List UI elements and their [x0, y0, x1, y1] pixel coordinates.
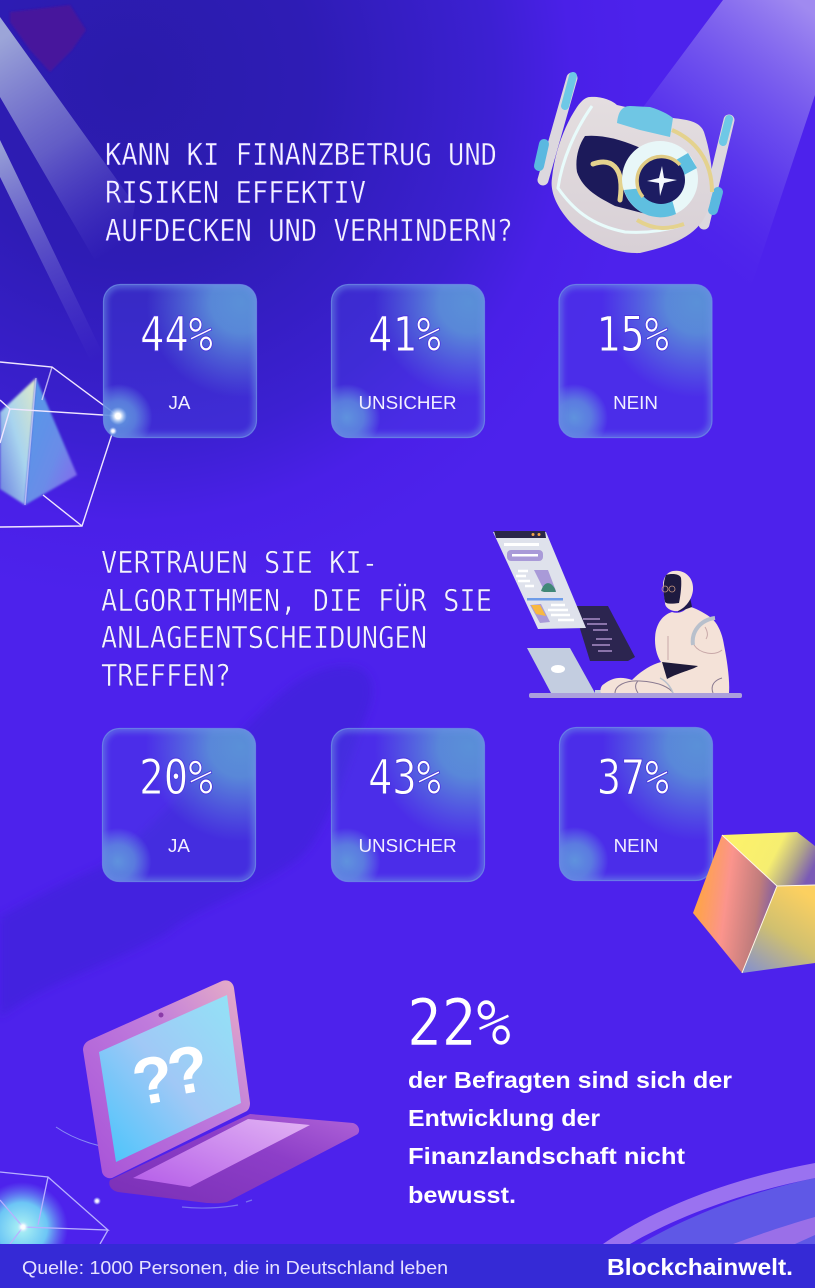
heading 1: RISIKEN EFFEKTIV — [105, 176, 366, 211]
grey laptop — [527, 648, 626, 694]
outer gold arcs — [637, 130, 712, 228]
eye cyan segments — [624, 188, 676, 217]
card: 15% NEIN: NEIN — [613, 392, 658, 413]
statistic description: Entwicklung der — [408, 1105, 600, 1131]
prism left face — [0, 378, 36, 505]
heading 2: TREFFEN? — [101, 659, 231, 694]
card: 43% UNSICHER — [332, 728, 484, 882]
shell light trim — [558, 106, 680, 232]
eye star — [647, 166, 677, 196]
glowing nodes of wire cube — [109, 407, 127, 435]
illustration: robot with laptop — [493, 531, 742, 698]
icon: robot head — [539, 76, 729, 253]
illustration: purple laptop with question marks — [56, 980, 359, 1208]
spark — [93, 1197, 101, 1205]
light beam: top left upper — [0, 17, 135, 300]
brand logo: Blockchainwelt. — [607, 1254, 793, 1280]
left antenna — [543, 78, 572, 180]
statistic description: bewusst. — [408, 1182, 516, 1208]
laptop base — [109, 1114, 359, 1203]
card: 43% UNSICHER: 43% — [368, 750, 441, 806]
background blob: dark swoosh — [0, 666, 372, 1017]
card: 37% NEIN: NEIN — [614, 835, 658, 856]
glow — [0, 1182, 68, 1274]
light streaks: bottom right — [603, 1163, 815, 1244]
statistic: 22%: 22% — [407, 987, 511, 1061]
card: 41% UNSICHER — [332, 284, 484, 438]
platform — [529, 693, 742, 698]
card: 20% JA — [102, 728, 256, 882]
card: 20% JA: 20% — [139, 750, 213, 806]
lid — [83, 980, 250, 1178]
question marks: ? — [127, 1040, 179, 1120]
prism right face — [25, 378, 77, 505]
statistic description — [408, 1067, 732, 1208]
visor gold arc — [593, 162, 621, 200]
source text: Quelle: 1000 Personen, die in Deutschland leben — [22, 1258, 448, 1278]
shoulder strap — [693, 618, 715, 645]
leg outlines — [615, 678, 722, 693]
heading 2 — [101, 546, 492, 694]
web panel — [493, 531, 586, 629]
pelvis — [662, 662, 698, 679]
cube wire lines — [0, 362, 118, 527]
orbit line bottom — [182, 1200, 252, 1208]
question marks: ? — [162, 1030, 214, 1110]
light beam: top right — [600, 0, 815, 335]
card: 43% UNSICHER: UNSICHER — [358, 835, 457, 856]
card: 15% NEIN: 15% — [596, 307, 669, 363]
cyan top patch — [617, 106, 673, 137]
eye ring — [622, 141, 698, 217]
robot neck — [678, 597, 692, 612]
heading 2: ALGORITHMEN, DIE FÜR SIE — [101, 583, 492, 619]
webcam — [158, 1012, 164, 1018]
statistic description: der Befragten sind sich der — [408, 1067, 732, 1093]
robot head — [662, 571, 693, 611]
code panel — [573, 606, 635, 661]
wire lines — [0, 1172, 108, 1244]
wireframe cube with glow, bottom left — [0, 1172, 108, 1274]
right antenna — [704, 120, 729, 224]
question marks — [127, 1030, 214, 1120]
background blob: purple top left — [10, 5, 86, 72]
wireframe cube with prism, left — [0, 362, 118, 527]
card: 37% NEIN: 37% — [597, 750, 669, 806]
arm outline — [668, 627, 722, 660]
statistic description: Finanzlandschaft nicht — [408, 1143, 685, 1169]
card: 44% JA — [104, 284, 256, 438]
card: 20% JA: JA — [168, 835, 190, 856]
card: 41% UNSICHER: UNSICHER — [358, 392, 457, 413]
eye gold ring — [637, 157, 680, 197]
orbit line left — [56, 1127, 127, 1150]
eye dark core — [637, 156, 685, 204]
card: 41% UNSICHER: 41% — [368, 307, 441, 363]
card: 37% NEIN — [560, 728, 712, 880]
screen — [99, 995, 241, 1162]
icon: gold cube — [693, 832, 815, 973]
card: 15% NEIN — [559, 284, 712, 438]
heading 1: KANN KI FINANZBETRUG UND — [105, 138, 497, 173]
visor — [576, 136, 650, 215]
robot body — [600, 606, 729, 693]
shell — [552, 97, 712, 253]
keyboard — [133, 1119, 310, 1187]
heading 2: VERTRAUEN SIE KI- — [101, 546, 378, 581]
card: 44% JA: 44% — [140, 307, 213, 363]
card: 44% JA: JA — [169, 392, 191, 413]
node — [17, 1221, 29, 1233]
heading 1: AUFDECKEN UND VERHINDERN? — [105, 214, 513, 249]
heading 2: ANLAGEENTSCHEIDUNGEN — [101, 621, 427, 656]
footer bar — [0, 1244, 815, 1288]
heading 1 — [105, 138, 513, 249]
light beam: top left lower — [0, 140, 102, 372]
